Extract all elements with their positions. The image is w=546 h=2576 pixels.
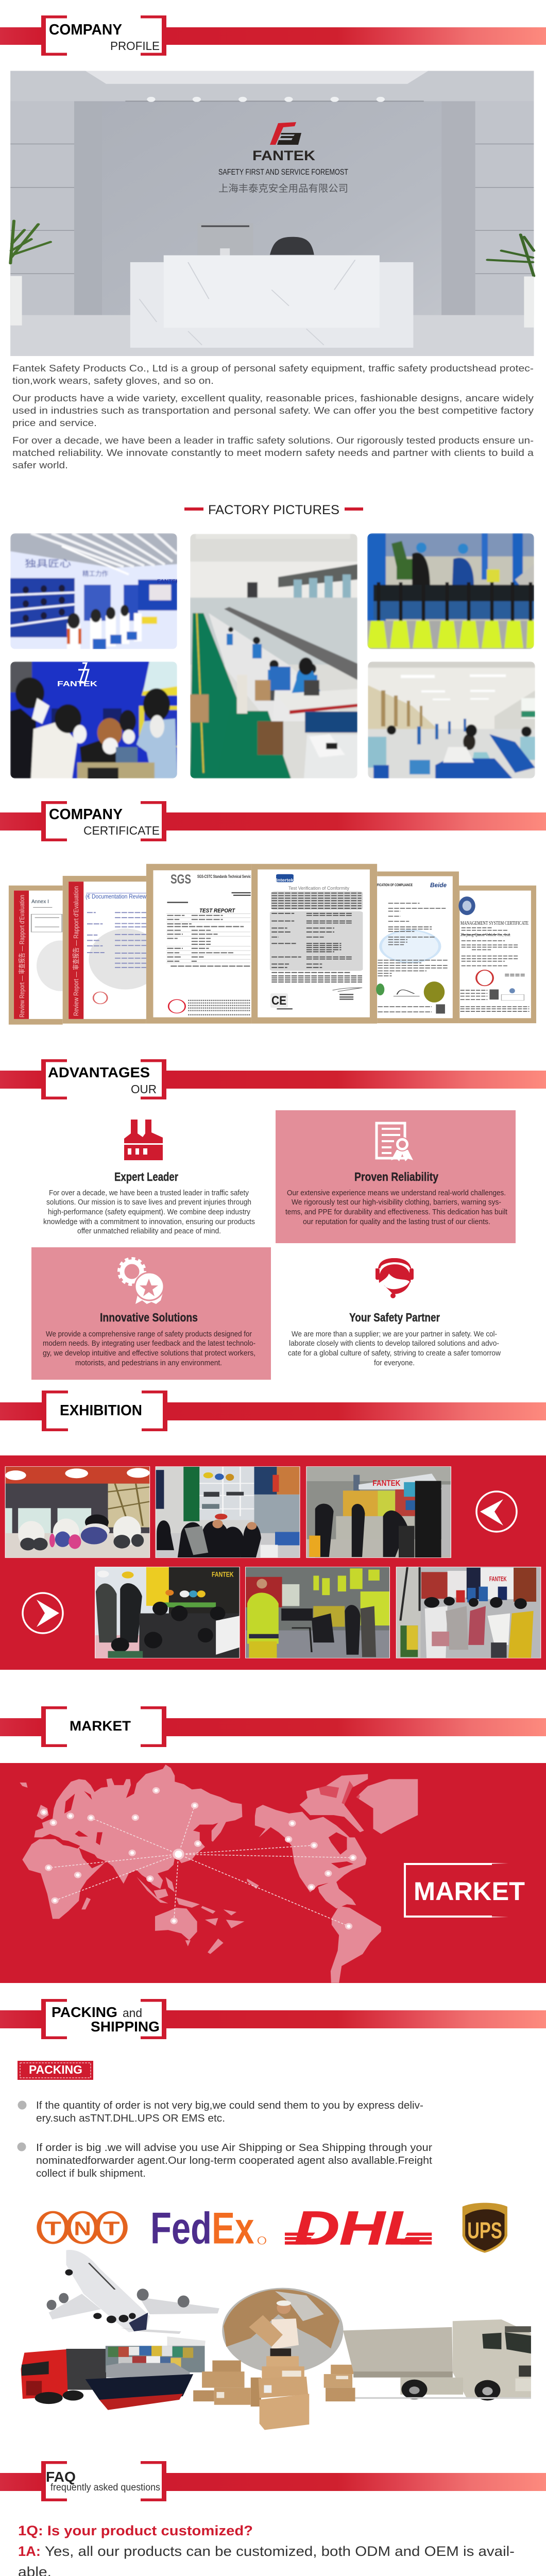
text block: packing notes	[18, 2100, 432, 2179]
certificate: documentation review	[63, 876, 162, 1024]
certificate: management system certificate	[458, 886, 536, 1023]
panel: exhibition photos	[0, 1455, 546, 1670]
photo: helmet display with visitors	[156, 1467, 300, 1557]
section header: our advantages	[0, 1059, 546, 1099]
globe	[222, 2288, 344, 2373]
certificate: Intertek verification of conformity: CE	[271, 994, 286, 1008]
photo: garment production line	[190, 534, 357, 778]
world map with dashed routes	[20, 1765, 418, 1983]
section header: our advantages: ADVANTAGES	[48, 1064, 150, 1080]
section header: FAQ	[0, 2461, 546, 2501]
certificate: Intertek verification of conformity: Test Verification of Conformity	[288, 886, 349, 891]
section header: company certificate	[0, 801, 546, 841]
panel: expert leader	[43, 1120, 255, 1235]
panel: expert leader: solutions. Our mission is to save lives and prevent injuries through	[46, 1198, 251, 1207]
text block: company introduction: matched reliability. We innovate constantly to meet modern safety needs and partner with clients to build a	[12, 448, 534, 458]
panel: innovative solutions: Innovative Solutions	[100, 1311, 198, 1324]
panel: proven reliability: Our extensive experience means we understand real-world challenges.	[287, 1189, 506, 1197]
panel: proven reliability: our reputation for quality and the lasting trust of our clients.	[303, 1217, 490, 1226]
panel: your safety partner: for everyone.	[374, 1359, 415, 1367]
white truck	[343, 2319, 531, 2400]
carrier logos: Ex	[212, 2204, 254, 2253]
section header: exhibition: EXHIBITION	[60, 1402, 142, 1419]
icon: gear and star badge	[119, 1259, 164, 1304]
section header: FAQ: FAQ	[46, 2469, 76, 2485]
panel: expert leader: For over a decade, we have been a trusted leader in traffic safety	[49, 1189, 249, 1197]
certificate: Beide verification of compliance: FICATION OF COMPLIANCE	[377, 884, 413, 887]
logo: UPS	[463, 2203, 507, 2253]
heading: factory pictures: FACTORY PICTURES	[208, 503, 339, 517]
panel: innovative solutions: We provide a comprehensive range of safety products designed for	[46, 1330, 252, 1338]
photo: reception lobby with Fantek logo: FANTEK	[252, 148, 316, 163]
certificate: SGS test report: SGS-CSTC Standards Technical Servic	[197, 874, 251, 879]
bullet: express delivery: ery.such asTNT.DHL.UPS OR EMS etc.	[36, 2113, 225, 2124]
section header: FAQ: frequently asked questions	[50, 2482, 160, 2493]
icon: headset support agent	[376, 1258, 414, 1298]
text block: company introduction: Our products have a wide variety, excellent quality, reasonable prices, fashionable designs, ancare widely	[12, 393, 534, 403]
section header: packing and shipping: PACKING	[52, 2004, 117, 2020]
certificate: SGS test report: SGS	[170, 872, 191, 887]
photo: sewing workshop	[368, 662, 535, 778]
text block: company introduction: Fantek Safety Products Co., Ltd is a group of personal safety equipment, traffic safety productshead protec-	[12, 363, 534, 374]
section header: exhibition	[0, 1391, 546, 1431]
logo: DHL	[285, 2201, 432, 2255]
section header: company profile: COMPANY	[49, 22, 122, 38]
text block: company introduction	[12, 363, 534, 470]
photo: Fantek booth at trade show: FANTEK	[372, 1479, 401, 1488]
text block: company introduction: safer world.	[12, 460, 68, 470]
certificate: annex I evaluation report: Review Report — 审查报告 — Rapport d'Evaluation	[18, 895, 26, 1018]
FAQ: question 1: 1A:	[18, 2544, 41, 2559]
panel: world market map	[0, 1763, 546, 1983]
plane	[47, 2250, 219, 2334]
bullet: express delivery	[18, 2100, 423, 2124]
certificate: SGS test report	[146, 864, 251, 1024]
bullet: air or sea shipping: collect if bulk shipment.	[36, 2168, 146, 2179]
logo: TNT: T	[45, 2217, 61, 2240]
photo: reception lobby with Fantek logo: SAFETY FIRST AND SERVICE FOREMOST	[218, 168, 348, 177]
certificate: SGS test report: TEST REPORT	[199, 908, 235, 914]
photo: trade fair visitors at Fantek booth: FANTEK	[57, 680, 97, 688]
panel: proven reliability	[276, 1110, 516, 1243]
certificates row	[9, 864, 536, 1025]
certificate: Beide verification of compliance	[376, 872, 459, 1023]
photo: Fantek booth at trade show	[306, 1467, 451, 1557]
illustration: air, sea and road freight	[21, 2250, 531, 2430]
bullet: air or sea shipping	[18, 2142, 432, 2179]
photo: hi-vis garments display	[246, 1567, 389, 1658]
tag: packing: PACKING	[29, 2063, 82, 2076]
certificate: annex I evaluation report: Annex I	[31, 899, 49, 905]
section header: company profile	[0, 15, 546, 56]
red truck	[21, 2349, 106, 2404]
tag: packing	[18, 2061, 93, 2080]
panel: your safety partner	[288, 1258, 501, 1367]
photo: trade fair visitors at Fantek booth	[10, 662, 177, 779]
logo: FedEx: Fed	[150, 2204, 212, 2253]
bullet: air or sea shipping: nominatedforwarder agent.Our long-term cooperated agent also avallable.Freight	[36, 2155, 432, 2166]
FAQ: question 1: 1Q: Is your product customized?	[18, 2523, 253, 2538]
carrier logos	[39, 2201, 507, 2255]
certificate: documentation review: (€ Documentation Review	[86, 893, 146, 900]
panel: expert leader: high-performance (safety equipment). We combine deep industry	[48, 1208, 250, 1216]
stacked cartons	[193, 2356, 355, 2430]
photo: glove dipping machine	[367, 533, 534, 649]
panel: innovative solutions	[31, 1247, 271, 1380]
text block: company introduction: For over a decade, we have been a leader in traffic safety solutions. Our rigorously tested products ensure un-	[12, 435, 534, 446]
callout: market label box: MARKET	[414, 1877, 525, 1906]
panel: innovative solutions: modern needs. By integrating user feedback and the latest technolo-	[43, 1339, 255, 1348]
photo: reception lobby with Fantek logo	[10, 71, 534, 356]
panel: your safety partner: laborate closely with clients to develop tailored solutions and advo-	[289, 1339, 499, 1348]
photo: visitors at apparel booth: FANTEK	[489, 1575, 507, 1583]
logo: TNT: T	[103, 2217, 120, 2240]
certificate: documentation review: Review Report — 审查报告 — Rapport d'Evaluation	[72, 886, 80, 1016]
icon: left arrow	[476, 1492, 517, 1532]
photo: respirator showroom: 精工力作	[82, 570, 108, 578]
photo: visitors at apparel booth	[396, 1567, 541, 1658]
cargo ship	[86, 2336, 206, 2410]
photo: respirator showroom: FANTEK	[157, 579, 180, 585]
photo: respirators on mannequin heads	[5, 1467, 150, 1557]
logo: TNT	[39, 2212, 125, 2243]
icon: certificate with rosette	[377, 1123, 413, 1161]
panel: proven reliability: We rigorously test our high-visibility clothing, barriers, warning sys-	[292, 1198, 501, 1207]
section header: company profile: PROFILE	[110, 39, 160, 53]
certificate: management system certificate: Zhejiang Qianxi Vehicle Co., Ltd.	[460, 933, 510, 937]
FAQ: question 1: Yes, all our products can be customized, both ODM and OEM is avail-	[45, 2544, 515, 2559]
panel: innovative solutions: gy, we develop intuitive and effective solutions that protect workers,	[43, 1349, 255, 1358]
panel: expert leader: Expert Leader	[114, 1170, 178, 1183]
logo: TNT: N	[74, 2217, 91, 2240]
section header: market: MARKET	[70, 1718, 131, 1734]
text block: company introduction: price and service.	[12, 418, 97, 428]
photo: reception lobby with Fantek logo: 上海丰泰克安全用品有限公司	[218, 183, 348, 194]
panel: your safety partner: We are more than a supplier; we are your partner in safety. We col-	[292, 1330, 497, 1338]
icon: factory	[124, 1120, 163, 1160]
certificate: Beide verification of compliance: Beide	[430, 882, 447, 889]
photo: respirator showroom: 独具匠心	[25, 558, 71, 569]
certificate: annex I evaluation report	[9, 886, 86, 1025]
text block: company introduction: tion,work wears, safety gloves, and so on.	[12, 376, 214, 386]
section header: market	[0, 1706, 546, 1747]
section header: packing and shipping: and	[123, 2006, 142, 2020]
section header: company certificate: CERTIFICATE	[83, 824, 160, 837]
callout: market label box	[404, 1863, 525, 1918]
panel: expert leader: offer unmatched reliability and peace of mind.	[77, 1227, 221, 1235]
panel: your safety partner: cate for a global culture of safety, striving to create a safer tomorrow	[288, 1349, 501, 1358]
logo: DHL: DHL	[294, 2201, 423, 2255]
photo: helmets and crowd at yellow booth: FANTEK	[212, 1570, 234, 1579]
section header: our advantages: OUR	[131, 1082, 157, 1096]
panel: proven reliability: tems, and PPE for durability and effectiveness. This dedication has built	[285, 1208, 508, 1216]
bullet: express delivery: If the quantity of order is not very big,we could send them to you by express deliv-	[36, 2100, 423, 2111]
section header: packing and shipping: SHIPPING	[91, 2019, 160, 2035]
text block: company introduction: used in industries such as transportation and personal safety. We can offer you the best competitive factory	[12, 405, 534, 416]
FAQ: question 1	[18, 2523, 515, 2576]
bullet: air or sea shipping: If order is big .we will advise you use Air Shipping or Sea Shipping through your	[36, 2142, 432, 2154]
photo: helmets and crowd at yellow booth	[95, 1567, 240, 1658]
photo: respirator showroom	[10, 533, 180, 649]
panel: expert leader: knowledge with a commitment to innovation, ensuring our products	[43, 1217, 255, 1226]
delivery man carrying box	[249, 2300, 299, 2357]
section header: packing and shipping	[0, 1999, 546, 2039]
certificate: Intertek verification of conformity: Intertek	[276, 877, 294, 883]
section header: company certificate: COMPANY	[49, 806, 123, 823]
panel: innovative solutions: motorists, and pedestrians in any environment.	[75, 1359, 222, 1367]
panel: your safety partner: Your Safety Partner	[349, 1311, 440, 1324]
certificate: Intertek verification of conformity	[251, 864, 377, 1024]
icon: right arrow	[23, 1593, 63, 1633]
panel: proven reliability: Proven Reliability	[354, 1170, 438, 1183]
